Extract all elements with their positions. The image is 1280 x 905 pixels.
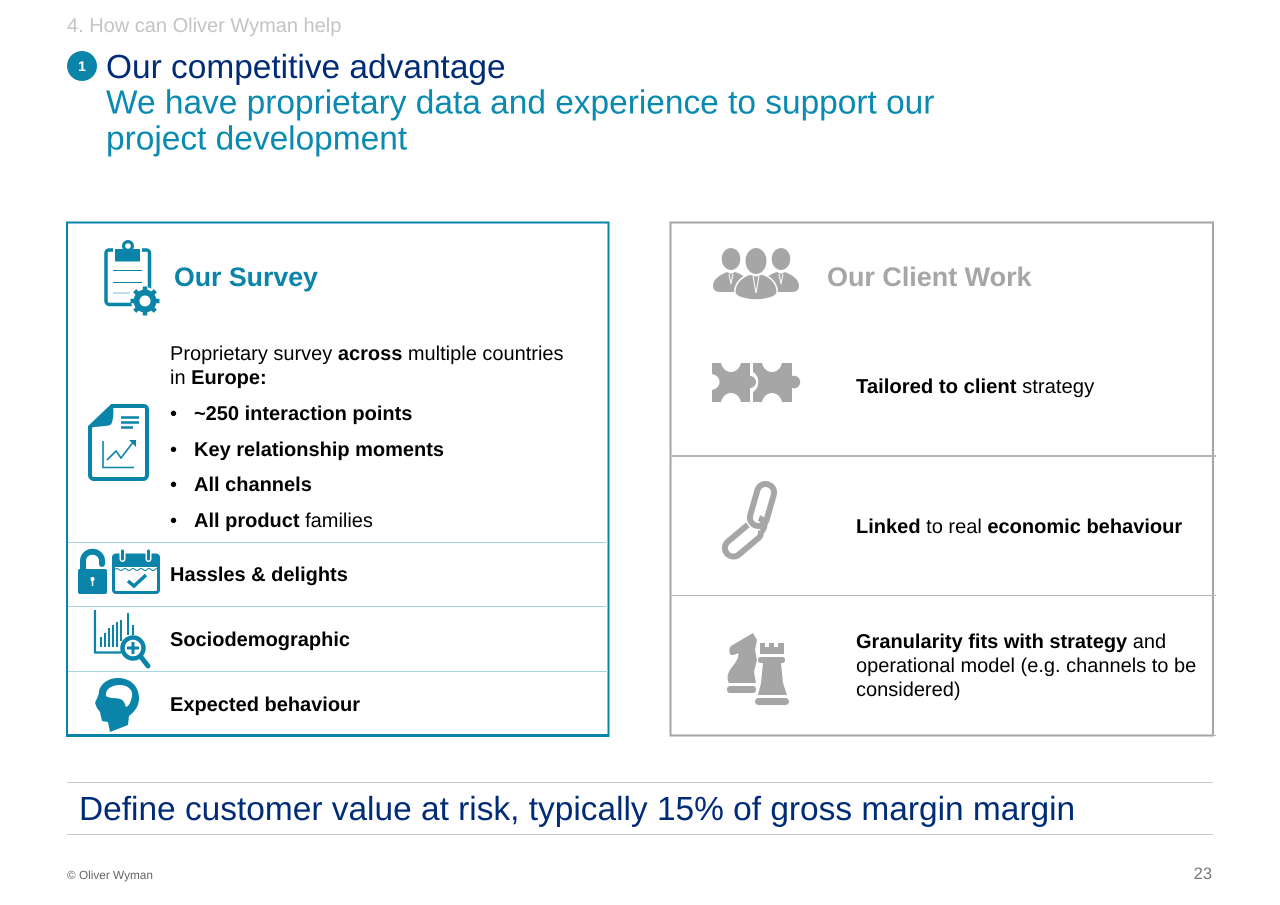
copyright: © Oliver Wyman xyxy=(67,868,153,882)
label: sociodemographic: Sociodemographic xyxy=(170,629,350,651)
text: granularity xyxy=(856,631,1196,701)
icon: calendar with check xyxy=(112,551,160,592)
panel: our survey xyxy=(66,222,610,736)
section breadcrumb: 4. How can Oliver Wyman help xyxy=(67,15,341,37)
survey description: • xyxy=(170,403,177,425)
icon: chain link xyxy=(721,482,776,560)
text: linked to real economic behaviour: Linked to real economic behaviour xyxy=(856,516,1182,538)
heading: our survey: Our Survey xyxy=(174,262,318,292)
survey description xyxy=(170,343,564,532)
survey description: Proprietary survey across multiple countries xyxy=(170,343,564,365)
survey description: Key relationship moments xyxy=(194,439,444,461)
number badge: 1 xyxy=(78,58,86,74)
title: Our competitive advantage xyxy=(106,49,506,86)
title: project development xyxy=(106,120,408,158)
label: hassles and delights: Hassles & delights xyxy=(170,564,348,586)
title xyxy=(106,49,934,158)
panel: our client work xyxy=(670,222,1216,736)
survey description: • xyxy=(170,510,177,532)
icon: puzzle pieces xyxy=(712,363,800,402)
text: tailored to client strategy: Tailored to client strategy xyxy=(856,376,1095,398)
icon: chess pieces xyxy=(727,633,789,705)
icon: document with chart xyxy=(89,405,147,479)
number badge xyxy=(67,51,97,81)
icon: clipboard with gear xyxy=(106,240,160,316)
icon: head with brain xyxy=(95,678,139,732)
survey description: All channels xyxy=(194,474,312,496)
text: granularity: operational model (e.g. channels to be xyxy=(856,655,1196,677)
survey description: • xyxy=(170,439,177,461)
survey description: All product families xyxy=(194,510,373,532)
title: We have proprietary data and experience to support our xyxy=(106,84,934,122)
icon: chart with magnifier xyxy=(95,610,148,666)
survey description: ~250 interaction points xyxy=(194,403,412,425)
page number: 23 xyxy=(1194,865,1212,883)
icon: business people xyxy=(713,248,799,300)
icon: open lock xyxy=(78,552,107,594)
takeaway banner: Define customer value at risk, typically 15% of gross margin margin xyxy=(79,791,1075,828)
takeaway banner xyxy=(67,782,1213,834)
survey description: • xyxy=(170,474,177,496)
heading: our client work: Our Client Work xyxy=(827,262,1032,292)
survey description: in Europe: xyxy=(170,367,267,389)
text: granularity: Granularity fits with strategy and xyxy=(856,631,1166,653)
text: granularity: considered) xyxy=(856,679,961,701)
label: expected behaviour: Expected behaviour xyxy=(170,694,360,716)
